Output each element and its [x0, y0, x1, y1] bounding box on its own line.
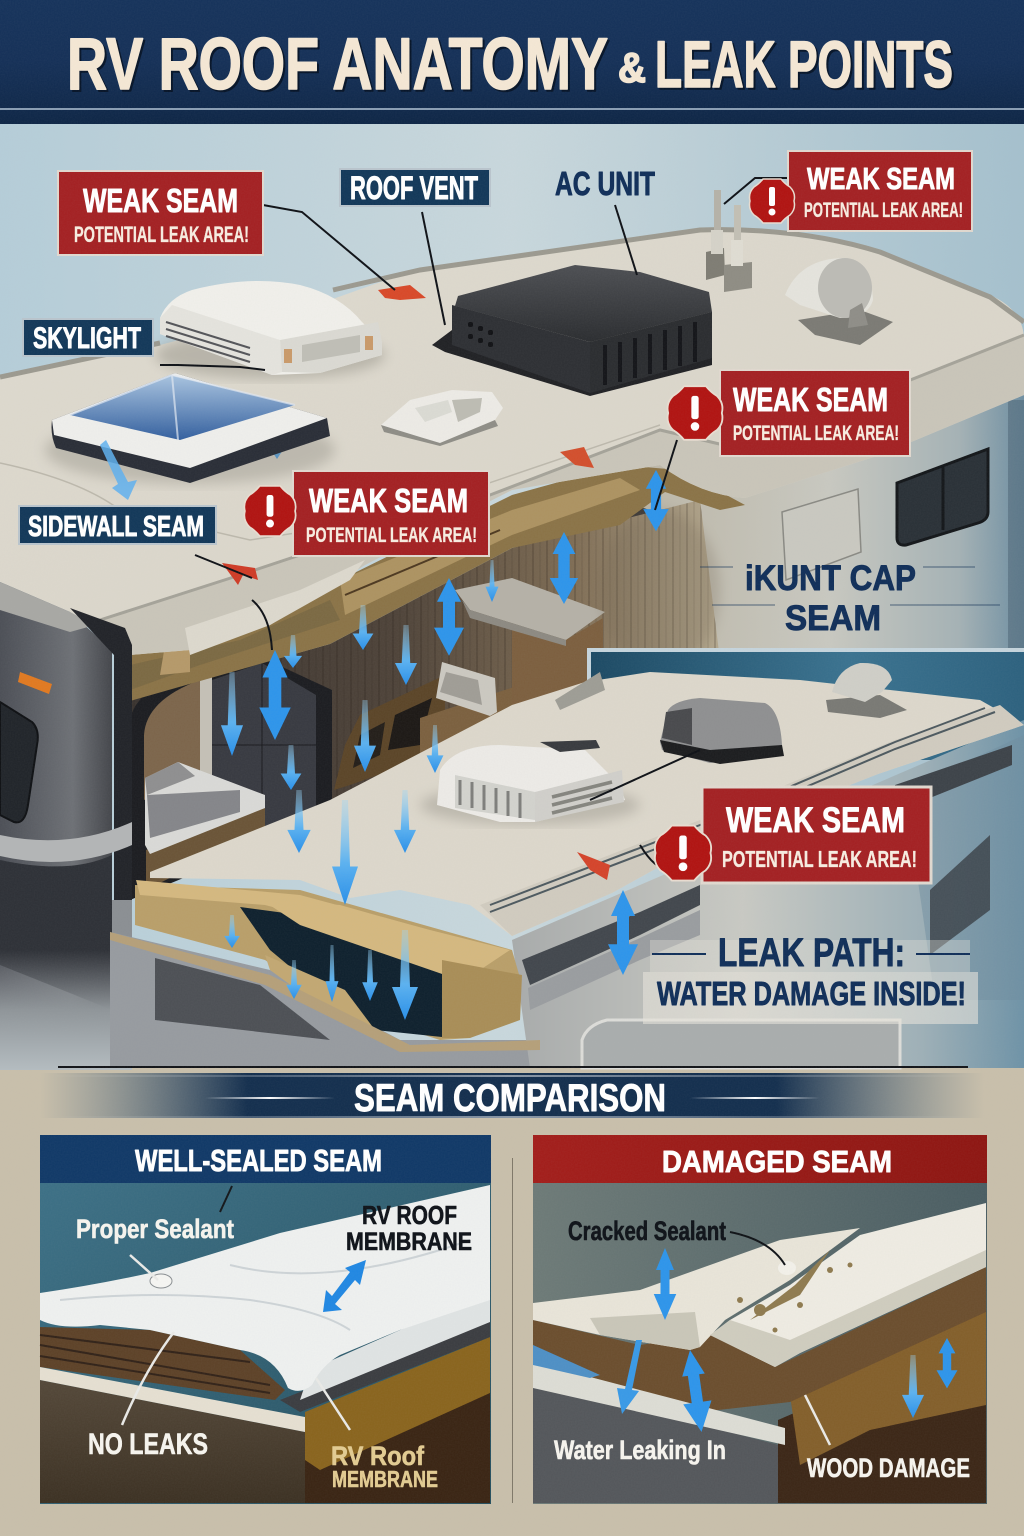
leaders	[730, 1232, 785, 1265]
icon: warning lower	[655, 826, 711, 880]
membrane arrow	[323, 1260, 366, 1312]
panel: well-sealed seam: RV Roof	[331, 1441, 425, 1471]
label: roof vent	[340, 169, 490, 206]
label: weak seam top left	[58, 171, 263, 255]
white board strip	[40, 1367, 305, 1432]
lower RV body	[110, 720, 1024, 1068]
satellite dish	[785, 258, 893, 345]
panel divider	[512, 1158, 513, 1503]
header text: DAMAGED SEAM	[662, 1144, 892, 1179]
wall shade	[600, 510, 720, 670]
section divider	[58, 1066, 968, 1068]
lower roof	[150, 672, 1024, 936]
lower page background	[0, 1066, 1024, 1536]
marker light	[18, 672, 52, 694]
kitchen counter	[145, 762, 265, 890]
dark cavity	[240, 907, 442, 1037]
panel: well-sealed seam: MEMBRANE	[346, 1228, 472, 1256]
label: weak seam lower	[702, 787, 931, 883]
label: roof vent: ROOF VENT	[350, 170, 478, 206]
label: weak seam top right: WEAK SEAM	[807, 161, 955, 196]
lower hatch	[582, 1020, 900, 1068]
interior cutaway	[130, 500, 720, 900]
page background	[0, 122, 1024, 1082]
AC unit	[432, 265, 712, 396]
grey lower block	[533, 1380, 778, 1503]
right substrate	[305, 1340, 490, 1503]
inset panel backdrop	[587, 648, 1024, 760]
label: weak seam centre right: WEAK SEAM	[733, 381, 888, 418]
labels: Proper Sealant	[76, 1214, 234, 1244]
left slab	[533, 1228, 860, 1350]
heading: main title banner: RV ROOF ANATOMY	[69, 26, 610, 107]
heading: seam comparison: SEAM COMPARISON	[354, 1077, 666, 1120]
labels: Cracked Sealant	[568, 1216, 726, 1246]
wavy fascia cloth	[185, 560, 365, 655]
label: sidewall seam: SIDEWALL SEAM	[28, 511, 204, 543]
panel: damaged seam: WOOD DAMAGE	[807, 1453, 970, 1483]
white AC unit	[420, 740, 640, 825]
wood cabinet	[455, 578, 605, 735]
callout: leak path	[643, 931, 978, 1024]
skylight leak arrow	[100, 440, 137, 500]
wood layer	[533, 1267, 986, 1412]
label: front cap seam: SEAM	[785, 599, 881, 638]
roof seam line upper	[333, 230, 1024, 322]
foam strip	[533, 1362, 785, 1445]
right substrate	[778, 1330, 986, 1503]
right slab	[710, 1203, 986, 1367]
cab window	[0, 702, 38, 822]
shelf frame	[334, 675, 520, 790]
lip	[480, 705, 1024, 936]
label: front cap seam	[700, 559, 1000, 638]
icon: warning centre	[244, 486, 296, 536]
service hatch	[782, 489, 861, 580]
RV sidewall	[590, 380, 1024, 700]
panel: damaged seam	[533, 1135, 987, 1504]
label: weak seam centre	[293, 471, 489, 556]
RV front body	[0, 582, 132, 1070]
small roof vent	[381, 390, 503, 446]
white membrane	[40, 1185, 490, 1391]
roof vent dome	[155, 281, 385, 379]
leaders	[122, 1255, 350, 1430]
heading: main title banner: &	[618, 44, 646, 91]
dark gutter	[280, 1317, 490, 1412]
label: weak seam top left: WEAK SEAM	[83, 182, 238, 219]
icon: warning centre right	[668, 386, 722, 440]
red seam flags	[222, 285, 610, 880]
panel: damaged seam: Water Leaking In	[554, 1435, 726, 1465]
label: AC unit: AC UNIT	[555, 165, 655, 202]
wood layer	[40, 1327, 285, 1400]
label: weak seam lower: POTENTIAL LEAK AREA!	[722, 846, 917, 872]
icon: warning top right	[750, 179, 794, 223]
upper wood beam	[130, 465, 745, 701]
lower roof seam lines	[490, 708, 985, 905]
lower satellite	[826, 663, 907, 718]
heading: main title banner	[0, 0, 1024, 124]
label: weak seam centre: WEAK SEAM	[309, 482, 468, 519]
water arrows	[654, 1248, 676, 1320]
panel: well-sealed seam: NO LEAKS	[88, 1428, 208, 1461]
header	[40, 1135, 491, 1183]
roof seam lip	[100, 335, 1024, 655]
skylight	[45, 373, 335, 500]
lower wood damage	[110, 880, 540, 1052]
label: weak seam top right	[788, 151, 972, 231]
heading: main title banner: RV ROOF ANATOMY	[67, 24, 608, 105]
sealant blob	[778, 1261, 796, 1275]
label: weak seam centre right: POTENTIAL LEAK AREA!	[733, 422, 899, 445]
label: weak seam centre: POTENTIAL LEAK AREA!	[306, 524, 477, 547]
door	[130, 652, 332, 900]
lower wall fascia	[522, 885, 700, 985]
label: skylight: SKYLIGHT	[33, 322, 141, 355]
lower rear window	[930, 835, 990, 955]
body stripe	[0, 822, 132, 862]
lower block	[40, 1380, 305, 1503]
heading: seam comparison	[40, 1073, 984, 1120]
desk keypad	[436, 662, 497, 716]
header	[533, 1135, 987, 1183]
upper roof	[0, 228, 1024, 655]
label: sidewall seam	[19, 506, 216, 544]
header text: WELL-SEALED SEAM	[135, 1143, 382, 1178]
label: weak seam centre right	[720, 370, 910, 456]
leader lines	[160, 178, 790, 870]
panel: well-sealed seam: RV ROOF	[362, 1200, 457, 1230]
label: weak seam lower: WEAK SEAM	[726, 801, 905, 840]
grey AC unit	[660, 698, 784, 764]
callout: leak path: LEAK PATH:	[718, 931, 905, 975]
leak arrows	[221, 432, 669, 1020]
panel: well-sealed seam	[40, 1135, 491, 1504]
sealant dot	[150, 1274, 172, 1288]
label: skylight	[23, 319, 153, 356]
label: weak seam top left: POTENTIAL LEAK AREA!	[74, 222, 249, 247]
window	[897, 449, 988, 545]
panel: well-sealed seam: MEMBRANE	[332, 1466, 438, 1492]
membrane ribs	[300, 1290, 490, 1400]
vent pipes	[706, 190, 752, 292]
crack debris	[737, 1250, 852, 1332]
label: front cap seam: iKUNT CAP	[745, 559, 916, 598]
